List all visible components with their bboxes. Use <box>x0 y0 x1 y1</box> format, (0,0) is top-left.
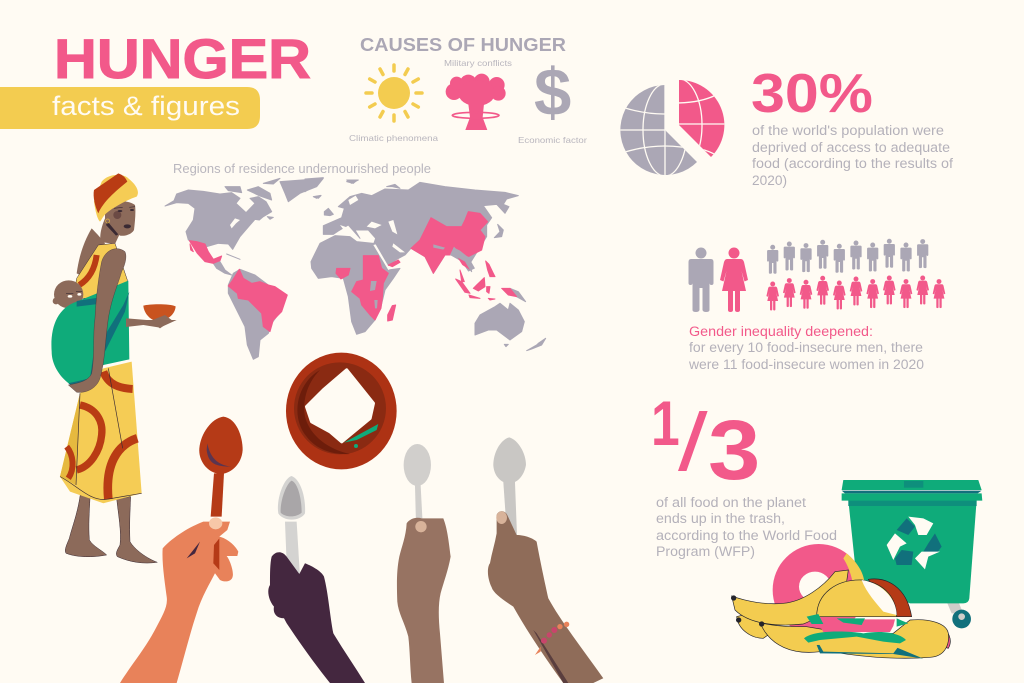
icon: burger <box>804 579 912 653</box>
icon: metal spoon in dark hand <box>268 476 365 683</box>
icon: recycling bin <box>842 480 982 628</box>
woman: head wrap <box>94 173 138 222</box>
icon: wooden spoon in orange hand <box>120 417 243 683</box>
americas pink regions <box>189 241 287 332</box>
title <box>0 27 311 129</box>
illustration: bowl and hands with spoons <box>120 353 603 683</box>
description food waste: Program (WFP) <box>656 544 755 559</box>
map heading: Regions of residence undernourished people <box>173 162 431 176</box>
americas grey land <box>165 178 357 359</box>
woman: front arm <box>68 249 126 392</box>
great lakes <box>230 218 240 228</box>
icon: recycle arrows <box>887 517 942 569</box>
subtitle banner: facts & figures <box>52 91 240 121</box>
icon: mushroom cloud <box>446 74 506 130</box>
label: military conflicts: Military conflicts <box>444 58 512 68</box>
icon: pink donut <box>773 544 865 636</box>
icon: hot dog <box>817 620 950 659</box>
icon: large man <box>688 248 714 312</box>
icon: large woman <box>720 248 748 312</box>
icon: bowl of rice <box>286 353 397 469</box>
gender text: Gender inequality deepened: <box>689 324 873 339</box>
icon: metal spoon in hand with bracelet <box>488 437 603 683</box>
gender text: were 11 food-insecure women in 2020 <box>688 357 924 372</box>
description 30%: deprived of access to adequate <box>752 140 950 155</box>
panel: food waste statistic <box>651 389 982 659</box>
grey inserts <box>370 244 475 308</box>
bracelet <box>535 622 569 655</box>
description 30%: 2020) <box>752 173 787 188</box>
eastern pink regions <box>336 212 517 321</box>
big fraction 1/3 <box>651 389 760 497</box>
woman: face <box>105 201 135 236</box>
panel: 30 percent statistic <box>620 74 953 188</box>
big fraction 1/3: 3 <box>708 403 760 497</box>
label: economic factor: Economic factor <box>518 135 587 145</box>
big fraction 1/3: / <box>678 397 708 488</box>
illustration: woman carrying baby <box>51 173 177 563</box>
title: HUNGER <box>54 27 311 90</box>
world map <box>165 178 546 359</box>
map: eastern hemisphere <box>305 178 546 351</box>
woman: facial features <box>106 207 135 236</box>
icon: globe pie chart <box>620 80 724 175</box>
woman: legs <box>65 492 157 563</box>
baby head <box>53 280 83 308</box>
icon: bananas <box>731 570 848 652</box>
woman: skirt <box>60 362 142 503</box>
gender text: for every 10 food-insecure men, there <box>689 340 923 355</box>
woman: yellow top <box>73 243 128 298</box>
woman: back shoulder <box>77 228 105 277</box>
label: climatic phenomena: Climatic phenomena <box>349 133 438 143</box>
inland seas <box>340 196 405 270</box>
woman: hand and bowl <box>126 304 177 328</box>
pictogram: ten men <box>767 239 928 274</box>
eastern grey land <box>305 178 546 351</box>
description food waste: ends up in the trash, <box>656 511 785 526</box>
icon: metal spoon in brown hand <box>397 444 451 683</box>
description 30%: of the world's population were <box>752 123 944 138</box>
panel: causes of hunger <box>349 34 587 145</box>
description 30%: food (according to the results of <box>752 156 953 171</box>
map: americas <box>165 178 357 359</box>
big number 30%: 30% <box>751 62 873 124</box>
woman: green sling <box>51 281 129 387</box>
description food waste: of all food on the planet <box>656 495 806 510</box>
illustration: bin and food <box>731 480 982 659</box>
panel: gender inequality <box>688 239 945 372</box>
subtitle banner <box>0 87 260 129</box>
description food waste: according to the World Food <box>656 528 837 543</box>
woman: neck <box>100 218 120 244</box>
icon: sun <box>366 65 422 121</box>
causes heading: CAUSES OF HUNGER <box>360 34 566 55</box>
icon: dollar sign: $ <box>534 55 571 130</box>
big fraction 1/3: 1 <box>651 389 680 459</box>
pictogram: eleven women <box>766 275 945 310</box>
